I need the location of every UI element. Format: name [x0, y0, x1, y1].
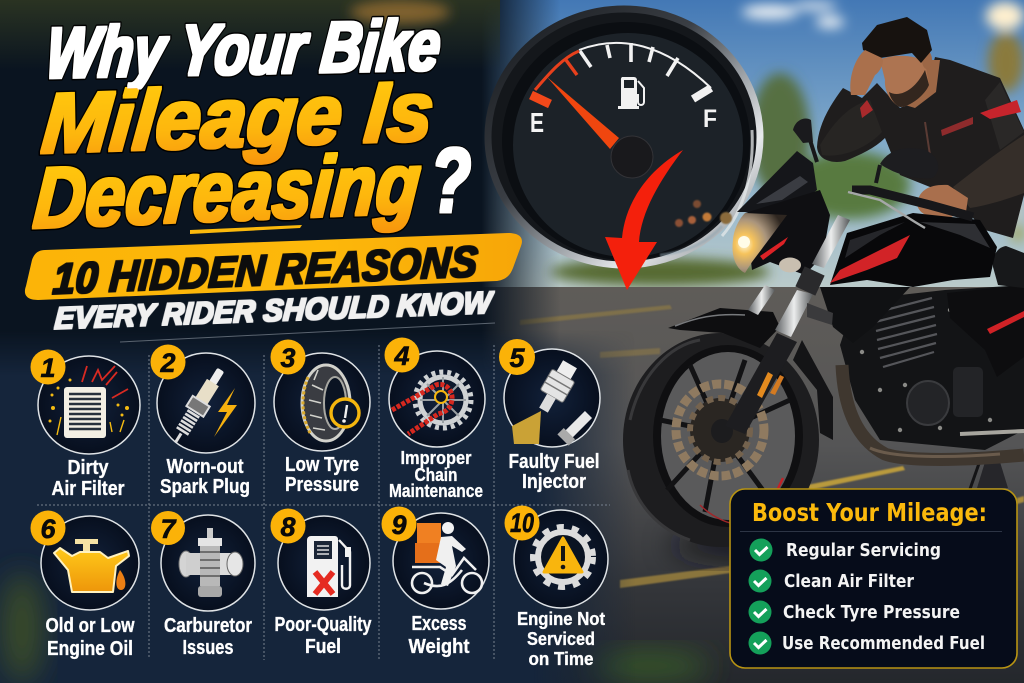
rider with hand on head [817, 17, 1024, 238]
hand on grip [917, 185, 968, 219]
label: old or low engine oil: Engine Oil [47, 638, 133, 660]
label: carburetor issues: Issues [182, 637, 234, 659]
number badge 7: 7 [160, 514, 177, 544]
title: ? [431, 130, 471, 232]
item: check tyre pressure [748, 600, 960, 624]
item: check tyre pressure: Check Tyre Pressure [783, 602, 960, 623]
gauge scale arc and ticks [531, 43, 711, 104]
side panel with stripe [947, 285, 1024, 377]
reason 6: old or low engine oil [30, 510, 139, 660]
number badge 7 [151, 511, 185, 545]
label: faulty fuel injector: Injector [522, 471, 586, 493]
gauge letters: F [703, 105, 717, 133]
gauge letters: E [530, 107, 544, 138]
number badge 2 [150, 344, 186, 380]
icon: overloaded rider [412, 522, 482, 593]
number badge 4: 4 [393, 341, 410, 371]
front forks [812, 215, 850, 268]
number badge 8 [270, 508, 306, 544]
label: poor-quality fuel [274, 614, 372, 658]
label: worn-out spark plug: Spark Plug [160, 476, 250, 498]
red tank stripe [830, 235, 910, 283]
dark left background behind heading [0, 0, 635, 683]
title [30, 6, 471, 247]
red down arrow [605, 150, 683, 290]
item: clean air filter: Clean Air Filter [784, 571, 914, 592]
headlight [732, 213, 787, 273]
needle hub [611, 136, 653, 178]
number badge 2: 2 [159, 348, 176, 378]
info box: boost your mileage [730, 489, 1017, 668]
label: dirty air filter: Dirty [68, 457, 109, 479]
fuel pump symbol [618, 77, 644, 109]
number badge 5: 5 [509, 343, 525, 373]
label: low tyre pressure: Low Tyre [285, 454, 359, 476]
label: old or low engine oil [46, 615, 135, 660]
label: excess weight [408, 613, 470, 658]
label: engine not serviced on time: Engine Not [517, 608, 605, 629]
reason 4: improper chain maintenance [384, 338, 485, 501]
number badge 1: 1 [40, 353, 56, 383]
item: clean air filter [748, 570, 914, 592]
label: poor-quality fuel: Poor-Quality [274, 614, 372, 636]
label: engine not serviced on time: on Time [528, 648, 594, 669]
subtitle banner: 10 hidden reasons: 10 HIDDEN REASONS [51, 238, 479, 304]
label: old or low engine oil: Old or Low [46, 615, 135, 637]
needle [547, 77, 619, 149]
number badge 6: 6 [40, 514, 56, 544]
jacket [817, 57, 1024, 238]
icon: oil can [54, 539, 129, 592]
reason 10: engine not serviced on time [504, 506, 608, 669]
label: dirty air filter [52, 457, 125, 500]
number badge 9: 9 [391, 510, 407, 540]
label: dirty air filter: Air Filter [52, 478, 125, 500]
label: worn-out spark plug [160, 456, 250, 498]
title: Decreasing [30, 135, 424, 247]
mirrors [810, 140, 880, 183]
title underline [190, 225, 302, 234]
hair [862, 17, 932, 63]
neck and face [905, 60, 940, 108]
subtitle: every rider should know: EVERY RIDER SHOULD KNOW [54, 285, 495, 336]
title: Why Your Bike [42, 6, 444, 94]
number badge 3: 3 [280, 343, 296, 373]
label: low tyre pressure: Pressure [285, 474, 359, 496]
reason 1: dirty air filter [30, 350, 140, 500]
windshield and fairing [737, 151, 817, 212]
label: carburetor issues: Carburetor [164, 615, 252, 637]
label: worn-out spark plug: Worn-out [166, 456, 244, 478]
label: improper chain maintenance [389, 447, 483, 501]
engine block [840, 285, 1024, 450]
icon: chain and sprocket [392, 372, 471, 434]
reason 5: faulty fuel injector [499, 339, 600, 493]
jacket red stripes [980, 100, 1021, 119]
seat [993, 246, 1024, 288]
icon: spark plug [167, 365, 237, 447]
exhaust pipe [842, 365, 1024, 459]
reason 7: carburetor issues [151, 511, 255, 659]
front wheel [623, 333, 819, 547]
item: use recommended fuel: Use Recommended Fuel [782, 633, 985, 654]
label: improper chain maintenance: Improper [400, 447, 472, 468]
reason 2: worn-out spark plug [150, 344, 255, 498]
item: use recommended fuel [748, 632, 985, 654]
label: excess weight: Excess [412, 613, 466, 635]
icon: fuel pump with x [307, 536, 351, 597]
label: improper chain maintenance: Chain [414, 464, 458, 485]
radiator [807, 303, 833, 325]
number badge 3 [270, 340, 306, 374]
label: poor-quality fuel: Fuel [305, 636, 341, 658]
fuel gauge [485, 6, 763, 268]
frame panel [820, 287, 910, 343]
number badge 5 [499, 339, 535, 375]
icon: gear with warning [533, 527, 593, 587]
label: carburetor issues [164, 615, 252, 659]
footpeg [960, 431, 1024, 434]
label: improper chain maintenance: Maintenance [389, 480, 483, 501]
number badge 1 [30, 350, 66, 384]
gauge letters [530, 105, 717, 138]
label: low tyre pressure [285, 454, 359, 496]
raised hand [850, 50, 883, 95]
indicator [779, 258, 801, 272]
label: faulty fuel injector [508, 451, 600, 493]
number badge 9 [382, 506, 416, 542]
number badge 8: 8 [280, 512, 296, 542]
number badge 4 [384, 338, 420, 372]
reason 8: poor-quality fuel [270, 508, 372, 658]
icon: carburetor [179, 528, 243, 597]
motorcycle [623, 118, 1024, 547]
item: regular servicing: Regular Servicing [786, 540, 941, 561]
icon: tyre with gauge [302, 365, 359, 441]
reason 3: low tyre pressure [270, 340, 370, 496]
item: regular servicing [750, 538, 941, 562]
panel: 10 reasons grid [30, 338, 610, 669]
label: excess weight: Weight [408, 636, 470, 658]
title: Mileage Is [38, 64, 438, 172]
handlebar [852, 190, 973, 217]
fuel tank [830, 213, 997, 287]
boot and stand [977, 462, 1008, 488]
label: engine not serviced on time [517, 608, 605, 669]
reason 9: excess weight [382, 506, 489, 658]
icon: fuel injector [512, 358, 594, 446]
number badge 10: 10 [510, 508, 534, 538]
number badge 6 [30, 510, 66, 546]
front fender [668, 308, 780, 348]
label: faulty fuel injector: Faulty Fuel [508, 451, 600, 473]
label: engine not serviced on time: Serviced [527, 628, 595, 649]
icon: air filter [48, 366, 129, 438]
